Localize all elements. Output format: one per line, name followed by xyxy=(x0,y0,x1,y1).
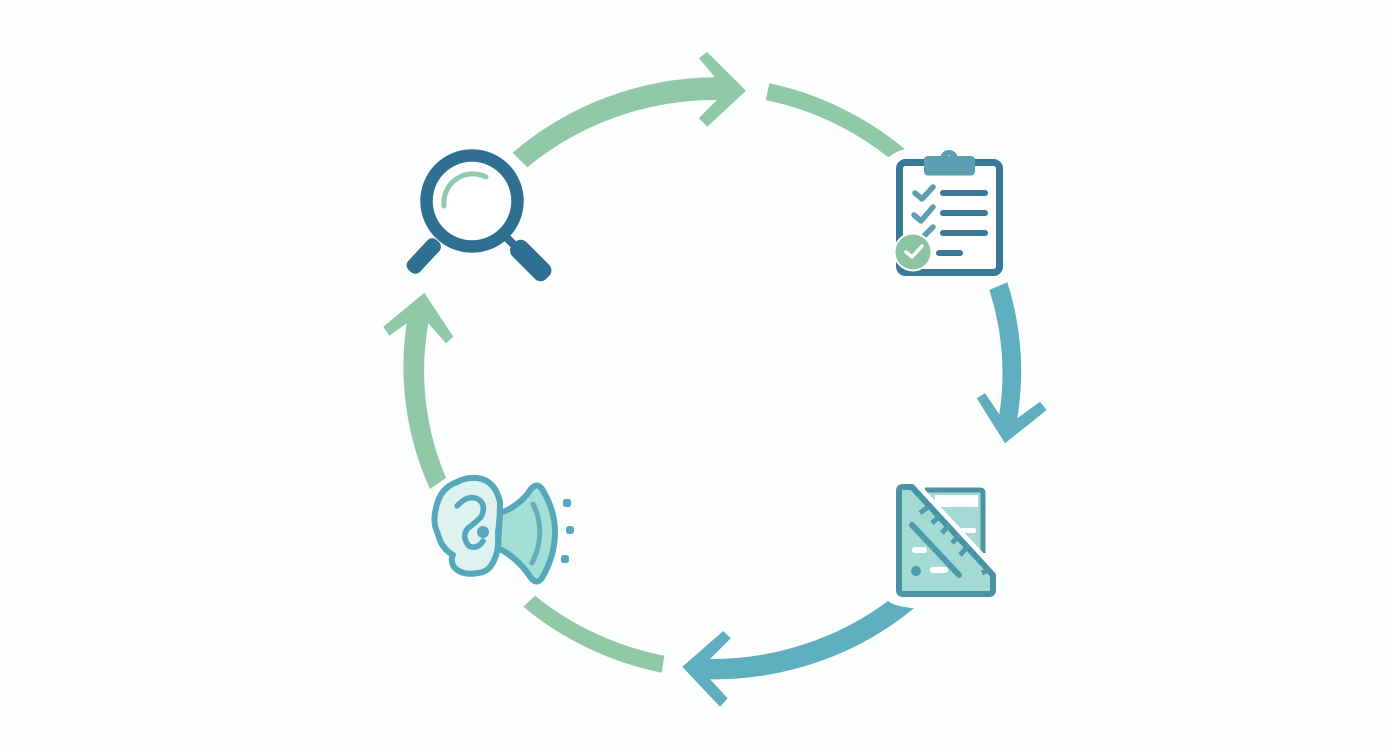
icon: ruler over document xyxy=(899,483,998,594)
green check badge xyxy=(894,232,932,272)
arrow: search to checklist xyxy=(513,52,746,167)
icon: magnifying glass xyxy=(404,156,555,285)
icon: ear with speaker horn xyxy=(434,478,574,582)
icon: clipboard checklist xyxy=(894,150,1000,272)
ear xyxy=(434,478,500,574)
ruler ticks xyxy=(920,507,988,573)
sound dots xyxy=(563,499,571,507)
arrow: checklist to measuring xyxy=(977,282,1047,443)
arrow: listening to search xyxy=(383,293,453,489)
arc segment: toward listening xyxy=(523,596,664,673)
checks and lines xyxy=(914,187,985,253)
speaker horn xyxy=(498,486,555,582)
arrow: measuring to listening xyxy=(682,601,914,707)
arc segment: toward checklist xyxy=(766,83,905,157)
